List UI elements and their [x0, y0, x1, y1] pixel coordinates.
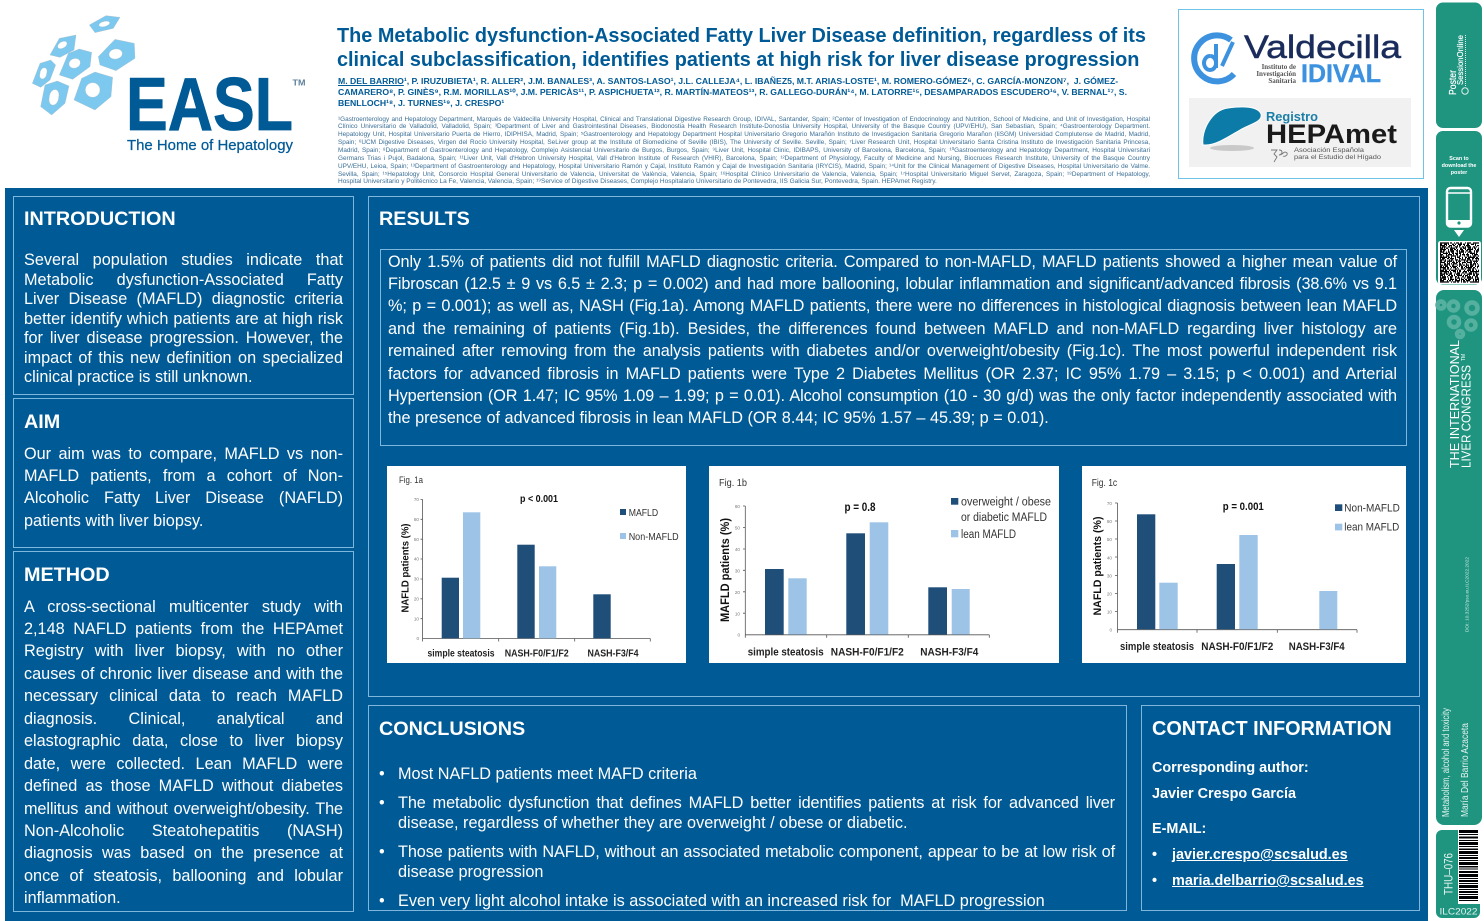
text: introduction [24, 251, 344, 386]
tab: congress: DOI: 10.3252/pso.eu.ILC2022.2022 [1464, 557, 1470, 632]
bars: Fig. 1c [1137, 514, 1337, 629]
chart: Fig. 1a: 0 [416, 636, 419, 641]
legend: Fig. 1c: Non-MAFLD [1344, 502, 1400, 514]
chart: Fig. 1c: p = 0.001 [1223, 501, 1264, 513]
bullet 4: Even very light alcohol intake is associated with an increased risk for MAFLD progression [398, 892, 1045, 910]
bullet 1: Most NAFLD patients meet MAFD criteria [398, 765, 697, 783]
tab: congress: María Del Barrio Azaceta [1460, 723, 1471, 817]
legend: Fig. 1b: overweight / obese [961, 496, 1051, 508]
legend: Fig. 1c [1335, 502, 1400, 534]
chart: Fig. 1b: NASH-F0/F1/F2 [831, 646, 904, 658]
text: introduction: impact of this new definition on specialized [24, 349, 343, 367]
text: method: defined as those MAFLD without diabetes [24, 777, 343, 795]
chart: Fig. 1a: 30 [414, 577, 419, 582]
text: method: A cross-sectional multicenter study with [24, 598, 343, 616]
chart: Fig. 1c: 40 [1107, 556, 1112, 560]
logo: Valdecilla [1194, 29, 1401, 88]
chart: Fig. 1a: simple steatosis [428, 648, 495, 660]
text: results: remained after removing from the analysis patients with diabetes and/or overweight/obesity (Fig.1c). The most powerful independent risk [388, 342, 1397, 360]
bullet 3: disease progression [398, 863, 543, 881]
text: results: the presence of advanced fibrosis in lean MAFLD (OR 8.44; IC 95% 1.57 – 45.39; p = 0.01). [388, 409, 1049, 427]
heading: results: RESULTS [379, 208, 470, 230]
chart: Fig. 1a: Fig. 1a [399, 475, 423, 485]
text: method: necessary clinical data to reach MAFLD [24, 687, 343, 705]
legend: Fig. 1b [951, 496, 1051, 541]
authors [338, 76, 1127, 108]
legend: Fig. 1b: or diabetic MAFLD [961, 512, 1047, 524]
legend: Fig. 1b: lean MAFLD [961, 529, 1016, 541]
text: results: Only 1.5% of patients did not fulfill MAFLD diagnostic criteria. Compared to non-MAFLD, MAFLD patients showed a higher mean value of [388, 253, 1397, 271]
panel: introduction [13, 196, 354, 395]
chart: Fig. 1a: 10 [414, 616, 419, 621]
author name: Javier Crespo García [1152, 786, 1296, 802]
chart: Fig. 1b: p = 0.8 [844, 500, 876, 514]
heading: contact information: CONTACT INFORMATION [1152, 718, 1392, 740]
logo wordmark: EASL [126, 62, 293, 146]
tab: scan to download: Scan to [1449, 156, 1469, 162]
title [337, 24, 1146, 70]
chart: Fig. 1c [1082, 466, 1406, 663]
chart: Fig. 1a: NAFLD patients (%) [400, 524, 412, 612]
authors: CAMARERO⁸, P. GINÈS⁹, R.M. MORILLAS¹⁰, J.M. PERICÀS¹¹, P. ASPICHUETA¹², R. MARTÍN-MATEOS¹³, R. GALLEGO-DURÁN¹⁴, M. LATORRE¹⁵, DESAMPARADOS ESCUDERO¹⁶, V. BERNAL¹⁷, S. [338, 87, 1127, 97]
logo: Valdecilla: Sanitaria [1268, 77, 1296, 85]
tab: poster session online: SessionOnline [1456, 34, 1465, 85]
text: method: date, were collected. Lean MAFLD were [24, 755, 343, 773]
tab: poster session online [1436, 2, 1482, 128]
chart: Fig. 1c: 50 [1107, 537, 1112, 542]
text: results: Hypertension (OR 1.47; IC 95% 1.09 – 1.99; p = 0.01). Alcohol consumption (10 - 30 g/d) was the only factor independently associated with [388, 387, 1397, 405]
text: results [388, 253, 1398, 427]
QR code [1438, 241, 1481, 284]
chart: Fig. 1a: 50 [414, 537, 419, 542]
sidebar [1435, 2, 1482, 918]
text: introduction: Metabolic dysfunction-Associated Fatty [24, 271, 343, 289]
heading: introduction: INTRODUCTION [24, 208, 176, 230]
panel: results [368, 196, 1420, 697]
legend: Fig. 1a [620, 507, 679, 543]
heading: conclusions: CONCLUSIONS [379, 718, 525, 740]
text: method: diagnosis. Clinical, analytical and [24, 710, 343, 728]
tab: poster session online: Poster [1448, 69, 1459, 95]
chart: Fig. 1b: simple steatosis [748, 646, 824, 658]
text: method: Non-Alcoholic Steatohepatitis (NASH) [24, 822, 343, 840]
title: clinical subclassification, identifies patients at high risk for liver disease progression [337, 48, 1139, 70]
text: results: and the remaining of patients (Fig.1b). Besides, the differences found between MAFLD and non-MAFLD regarding liver histology are [388, 320, 1397, 338]
bullet 1: • [379, 765, 385, 783]
legend: Fig. 1a: Non-MAFLD [629, 531, 679, 543]
heading: method: METHOD [24, 564, 110, 586]
chart: Fig. 1c: 20 [1107, 592, 1112, 596]
bullet 2 [379, 794, 1115, 832]
authors: M. DEL BARRIO¹, P. IRUZUBIETA¹, R. ALLER², J.M. BANALES³, A. SANTOS-LASO¹, J.L. CALLEJA⁴, L. IBAÑEZ5, M.T. ARIAS-LOSTE¹, M. ROMERO-GÓMEZ⁶, C. GARCÍA-MONZON⁷, J. GÓMEZ- [338, 76, 1118, 86]
text: aim: Our aim was to compare, MAFLD vs non- [24, 445, 343, 463]
affiliations: Germans Trias i Pujol, Badalona, Spain; ¹¹Liver Unit, Vall d'Hebron University Hospital, Vall d'Hebron Institute of Research (VHIR), Barcelona, Spain; ¹²Department of Physiology, Faculty of Medicine and Nursing, Biocruces Research Institute, University of the Basque Country [338, 155, 1150, 162]
chart: Fig. 1c: 70 [1107, 501, 1112, 506]
icon: down arrow [1454, 230, 1464, 237]
tab: scan to download: download the [1442, 163, 1476, 169]
affiliations: Madrid, Spain; ⁸Department of Gastroenterology and Hepatology, Complejo Asistencial Universitario de Burgos, Burgos, Spain; ⁹Liver Unit, Hospital Clinic, IDIBAPS, University of Barcelona, Barcelona, Spain; ¹⁰Gastroenterology and Hepatology Department, Hospital Universitari [338, 147, 1150, 154]
barcode [1459, 830, 1478, 901]
legend: Fig. 1c: lean MAFLD [1344, 522, 1399, 534]
affiliations: Spain; ⁶UCM Digestive Diseases, Virgen del Rocío University Hospital, SeLiver group at the Institute of Biomedicine of Seville (IBIS), The University of Seville. Seville, Spain; ⁷Liver Research Unit, Hospital Universitario Santa Cristina Instituto de Investigación Sanitaria Princesa, [338, 139, 1150, 146]
chart: Fig. 1b: 30 [735, 568, 740, 574]
tab: congress: TM [1461, 354, 1467, 361]
logo: Registro HEPAmet: HEPAmet [1266, 119, 1397, 149]
chart: Fig. 1c: 0 [1109, 628, 1112, 632]
authors: BENLLOCH¹⁸, J. TURNES¹⁹, J. CRESPO¹ [338, 98, 504, 108]
logo: Registro HEPAmet: Asociación Española [1294, 147, 1365, 154]
chart: Fig. 1b: 50 [735, 526, 740, 530]
main blue background [5, 188, 1428, 921]
chart: Fig. 1c: NASH-F3/F4 [1289, 641, 1345, 653]
text: introduction: Several population studies indicate that [24, 251, 343, 269]
chart: Fig. 1a: 70 [414, 497, 419, 502]
legend: Fig. 1a: MAFLD [629, 507, 659, 519]
chart: Fig. 1b: 0 [737, 632, 740, 638]
text: aim [24, 445, 343, 530]
chart: Fig. 1b: NASH-F3/F4 [920, 646, 979, 658]
chart: Fig. 1a: NASH-F0/F1/F2 [505, 648, 569, 660]
logo: EASL [32, 16, 306, 154]
chart: Fig. 1a [387, 466, 686, 663]
e-mail 1: • javier.crespo@scsalud.es [1152, 847, 1348, 863]
tab: scan to download [1436, 131, 1482, 285]
chart: Fig. 1c: 30 [1107, 574, 1112, 578]
panel: method [13, 551, 354, 912]
logo: Valdecilla: Investigación [1256, 70, 1296, 78]
corresponding author: Corresponding author: [1152, 760, 1309, 776]
text: results: factors for advanced fibrosis in MAFLD patients were Type 2 Diabetes Mellitus (OR 2.37; IC 95% 1.79 – 3.15; p < 0.001) and Arterial [388, 365, 1397, 383]
affiliations: ¹Gastroenterology and Hepatology Department, Marqués de Valdecilla University Hospital, Clinical and Translational Digestive Research Group, IDIVAL, Santander, Spain; ²Center of Investigation of Endocrinology and Nutrition, School of Medicine, and Unit of Investigation, Hospital [338, 116, 1150, 123]
tab: barcode: THU–076 [1442, 853, 1456, 895]
text: introduction: Liver Disease (MAFLD) diagnostic criteria [24, 290, 343, 308]
tab: barcode: ILC2022 [1440, 906, 1478, 916]
panel: conclusions [368, 705, 1127, 911]
affiliations: Hospital Universitario y Politécnico La Fe, Valencia, Valencia, Spain; ¹⁹Service of Digestive Diseases, Complejo Hospitalario Universitario de Pontevedra, IIS Galicia Sur, Pontevedra, Spain. HEPAmet Registry. [338, 178, 937, 185]
partner logos panel [1178, 9, 1424, 179]
panel: aim [13, 398, 354, 548]
affiliations: Hepatology Unit, Hospital Universitario Puerta de Hierro, IDIPHISA, Madrid, Spain; ⁵Gastroenterology and Hepatology Department Hospital Universitario Gregorio Marañón Instituto de Investigacion Sanitaria Gregorio Marañon (IiSGM) Universidad Complutense de Madrid, Madrid, [338, 131, 1150, 138]
affiliations: UPV/EHU, Leioa, Spain; ¹³Department of Gastroenterology and Hepatology, Hospital Universitario Ramón y Cajal, Instituto Ramón y Cajal de Investigación Sanitaria (IRYCIS), Madrid, Spain; ¹⁴Unit for the Clinical Management of Digestive Diseases, Hospital Universitario de Valme. [338, 163, 1150, 170]
bullet 2: disease, regardless of whether they are overweight / obese or diabetic. [398, 814, 907, 832]
chart: Fig. 1c: simple steatosis [1120, 641, 1194, 653]
bullet 3: • [379, 843, 385, 861]
e-mail label: E-MAIL: [1152, 821, 1206, 837]
text: introduction: better identify which patients are at high risk [24, 310, 343, 328]
icon: phone [1447, 188, 1471, 226]
chart: Fig. 1c: NASH-F0/F1/F2 [1201, 641, 1273, 653]
bullet 2: • [379, 794, 385, 812]
chart: Fig. 1c: 10 [1107, 610, 1112, 614]
panel: contact information [1141, 705, 1420, 911]
chart: Fig. 1c: NAFLD patients (%) [1092, 516, 1104, 616]
text: method: diagnosis was based on the presence at [24, 844, 343, 862]
tab: congress: LIVER CONGRESS [1458, 365, 1474, 468]
text: method: causes of chronic liver disease and with the [24, 665, 343, 683]
text: method [24, 598, 343, 907]
chart: Fig. 1c: 60 [1107, 519, 1112, 524]
affiliations [338, 116, 1150, 185]
text: results: Fibroscan (12.5 ± 9 vs 6.5 ± 2.3; p = 0.002) and had more ballooning, lobular inflammation and significant/advanced fibrosis (38.6% vs 9.1 [388, 275, 1397, 293]
e-mail 2: • maria.delbarrio@scsalud.es [1152, 873, 1364, 889]
tab: scan to download: poster [1451, 170, 1468, 176]
chart: Fig. 1b: 20 [735, 590, 740, 595]
logo: Registro HEPAmet: Registro [1266, 109, 1318, 124]
text: aim: patients with liver biopsy. [24, 512, 203, 530]
chart: Fig. 1a: 60 [414, 517, 419, 522]
text: method: Registry with liver biopsy, with no other [24, 642, 343, 660]
tab: barcode [1436, 830, 1480, 918]
bullet 3: Those patients with NAFLD, without an associated metabolic component, appear to be at low risk of [398, 843, 1115, 861]
affiliations: Sevilla, Spain; ¹⁵Hepatology Unit, Consorcio Hospital General Universitario de Valencia, Universitat de València, Valencia, Spain; ¹⁶Hospital Clínico Universitario de Valencia, Valencia, Spain; ¹⁷Hospital Universitario Miguel Servet, Zaragoza, Spain; ¹⁸Department of Hepatology, [338, 170, 1150, 178]
logo: Valdecilla: Valdecilla [1244, 29, 1401, 65]
text: results: %; p = 0.001); as well as, NASH (Fig.1a). Among MAFLD patients, there were no differences in histological diagnosis between lean MAFLD [388, 297, 1397, 315]
chart: Fig. 1b: 40 [735, 547, 740, 552]
chart: Fig. 1b [709, 466, 1059, 663]
hexagon decoration [1438, 302, 1478, 337]
text: method: once of steatosis, ballooning and lobular [24, 867, 343, 885]
chart: Fig. 1a: p < 0.001 [520, 493, 558, 505]
bars: Fig. 1b [765, 522, 970, 634]
tab: congress [1436, 290, 1482, 825]
text: method: mellitus and without overweight/obesity. The [24, 800, 343, 818]
logo: Valdecilla: Instituto de [1262, 63, 1296, 71]
chart: Fig. 1c: Fig. 1c [1092, 478, 1117, 489]
bars: Fig. 1a [442, 512, 611, 638]
chart: Fig. 1a: NASH-F3/F4 [588, 648, 639, 660]
text: aim: Alcoholic Fatty Liver Disease (NAFLD) [24, 489, 343, 507]
affiliations: Clínico Universitario de Valladolid, Valladolid, Spain; ³Department of Liver and Gastrointestinal Diseases, Biodonostia Health Research Institute-Donostia University Hospital, University of the Basque Country (UPV/EHU), San Sebastian, Spain; ⁴Gastroenterology Department. [338, 123, 1150, 130]
title: The Metabolic dysfunction-Associated Fatty Liver Disease definition, regardless of its [337, 24, 1146, 46]
chart: Fig. 1b: Fig. 1b [719, 478, 747, 489]
bullet 2: The metabolic dysfunction that defines MAFLD better identifies patients at risk for advanced liver [398, 794, 1115, 812]
logo tagline: The Home of Hepatology [127, 137, 293, 154]
logo: Registro HEPAmet [1189, 98, 1411, 167]
trademark: TM [292, 78, 306, 88]
logo: Registro HEPAmet: para el Estudio del Hígado [1294, 154, 1382, 161]
bullet 4: • [379, 892, 385, 910]
text: aim: MAFLD patients, from a cohort of Non- [24, 467, 343, 485]
chart: Fig. 1b: 10 [735, 612, 740, 616]
chart: Fig. 1b: MAFLD patients (%) [720, 518, 732, 622]
tab: congress: Metabolism, alcohol and toxicity [1441, 708, 1452, 817]
tab: congress: THE INTERNATIONAL [1447, 340, 1462, 468]
text box: results [380, 249, 1407, 446]
text: method: 2,148 NAFLD patients from the HEPAmet [24, 620, 343, 638]
logo box [1178, 10, 1424, 178]
text: method: elastographic data, close to liver biopsy [24, 732, 343, 750]
text: introduction: clinical practice is still unknown. [24, 368, 252, 386]
text: method: inflammation. [24, 889, 121, 907]
icon: hexagon cluster [32, 16, 135, 115]
chart: Fig. 1a: 20 [414, 596, 419, 602]
chart: Fig. 1a: 40 [414, 557, 419, 562]
bullet 3 [379, 843, 1116, 881]
text: introduction: for liver disease progression. However, the [24, 329, 343, 347]
logo: Valdecilla: IDIVAL [1301, 60, 1381, 88]
heading: aim: AIM [24, 410, 60, 432]
chart: Fig. 1b: 60 [735, 504, 740, 509]
